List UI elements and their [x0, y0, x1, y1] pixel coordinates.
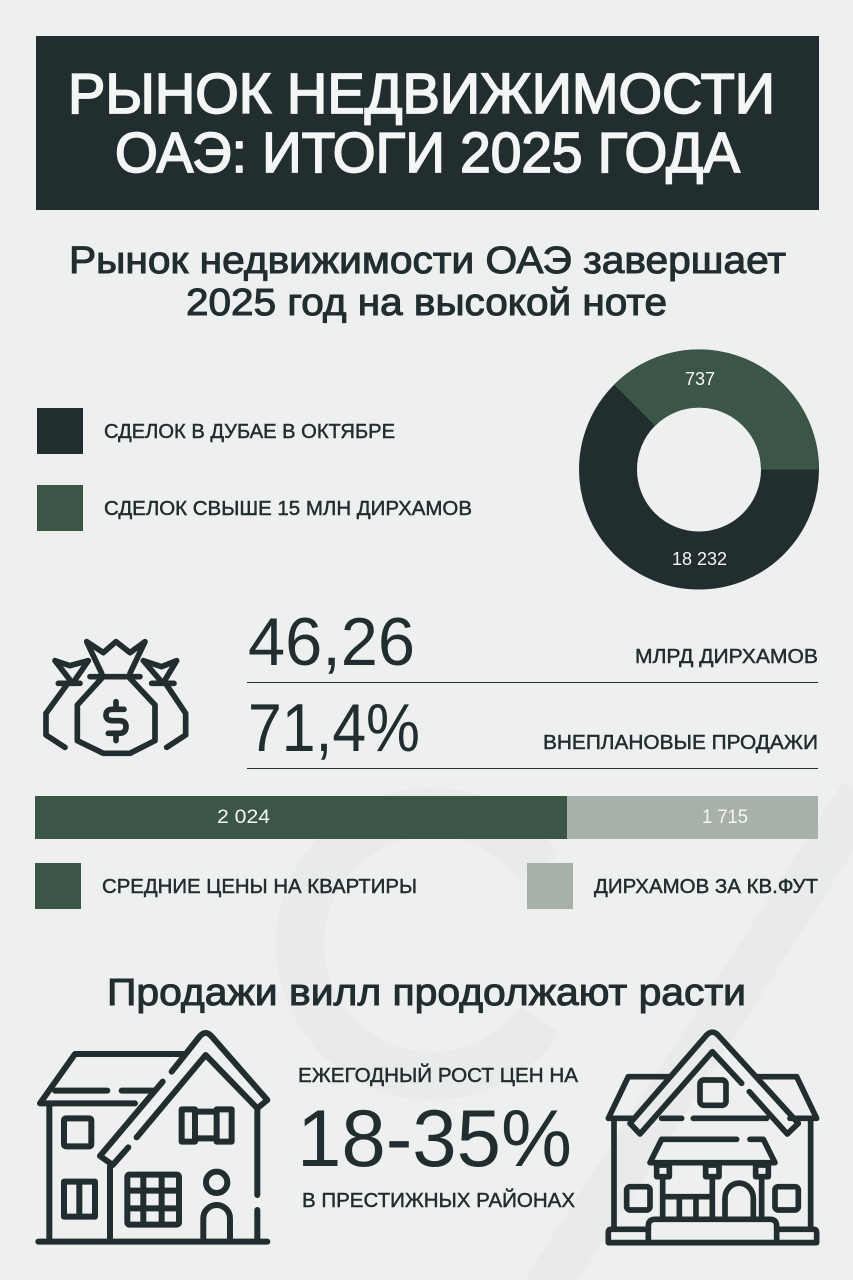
subtitle: Рынок недвижимости ОАЭ завершает — [69, 240, 786, 282]
stacked bar chart: 2 024 — [217, 807, 270, 828]
stat: 71,4%: ВНЕПЛАНОВЫЕ ПРОДАЖИ — [543, 732, 818, 754]
subtitle: 2025 год на высокой ноте — [186, 282, 667, 324]
stat: 71,4% — [247, 690, 818, 769]
donut chart — [608, 349, 819, 569]
title banner — [36, 36, 819, 210]
legend: apartment prices: СРЕДНИЕ ЦЕНЫ НА КВАРТИРЫ — [102, 876, 417, 898]
background watermark — [300, 795, 853, 1280]
donut chart: 737 — [685, 369, 715, 389]
stat: 71,4%: 71,4% — [248, 690, 420, 766]
stacked bar chart — [35, 796, 818, 839]
donut chart: 18 232 — [672, 549, 727, 569]
title banner: РЫНОК НЕДВИЖИМОСТИ — [68, 62, 775, 126]
growth text — [297, 1063, 579, 1212]
heading: villas: Продажи вилл продолжают расти — [107, 972, 746, 1014]
growth text: В ПРЕСТИЖНЫХ РАЙОНАХ — [302, 1188, 575, 1212]
legend: apartment prices: ДИРХАМОВ ЗА КВ.ФУТ — [594, 876, 818, 898]
stat: 46,26 — [247, 604, 818, 683]
legend: deals — [37, 408, 472, 531]
icon: money bags — [46, 642, 186, 753]
legend: apartment prices — [35, 863, 818, 909]
title banner: ОАЭ: ИТОГИ 2025 ГОДА — [115, 121, 740, 185]
icon: house left — [38, 1033, 267, 1242]
stacked bar chart: 1 715 — [702, 807, 748, 828]
growth text: 18-35% — [297, 1094, 572, 1184]
stat: 46,26: 46,26 — [248, 604, 415, 680]
icon: house right — [608, 1032, 817, 1243]
subtitle — [69, 240, 786, 324]
stat: 46,26: МЛРД ДИРХАМОВ — [635, 646, 818, 668]
legend: deals: СДЕЛОК В ДУБАЕ В ОКТЯБРЕ — [104, 421, 395, 443]
legend: deals: СДЕЛОК СВЫШЕ 15 МЛН ДИРХАМОВ — [104, 498, 472, 520]
growth text: ЕЖЕГОДНЫЙ РОСТ ЦЕН НА — [298, 1063, 579, 1087]
